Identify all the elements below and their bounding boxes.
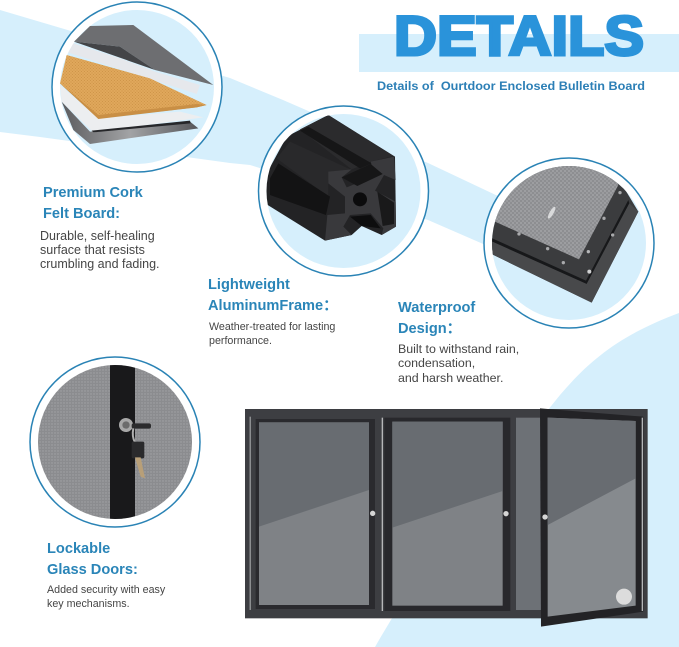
open door	[540, 408, 643, 627]
sticker	[616, 589, 632, 605]
text block: cork felt board: surface that resists	[40, 243, 145, 257]
title: DETAILS	[394, 4, 644, 67]
product photo: three-door bulletin board	[245, 408, 648, 627]
background: lower right light blue shape	[375, 313, 679, 647]
text block: lockable glass doors	[47, 541, 166, 610]
icon: extrusion profile	[265, 115, 396, 241]
text block: waterproof design: condensation,	[398, 356, 475, 370]
left door felt	[259, 422, 369, 605]
text block: aluminum frame	[208, 277, 338, 347]
panel: waterproof corner image	[484, 158, 654, 328]
text block: cork felt board: crumbling and fading.	[40, 257, 160, 271]
text block: lockable glass doors: Added security with easy	[47, 584, 166, 596]
icon: layered board	[60, 25, 213, 144]
text block: lockable glass doors: Lockable	[47, 541, 110, 557]
text block: waterproof design: Waterproof	[398, 300, 475, 316]
centre door felt	[392, 422, 503, 606]
right panel felt behind open door	[516, 418, 541, 610]
text block: waterproof design: and harsh weather.	[398, 371, 503, 385]
text block: aluminum frame: performance.	[209, 335, 272, 347]
text block: waterproof design	[398, 300, 519, 385]
background: diagonal light blue band	[0, 10, 520, 260]
text block: cork felt board: Durable, self-healing	[40, 229, 155, 243]
text block: aluminum frame: AluminumFrame：	[208, 298, 338, 314]
text block: waterproof design: Built to withstand rain,	[398, 342, 519, 356]
text block: cork felt board: Felt Board:	[43, 206, 120, 222]
text block: lockable glass doors: Glass Doors:	[47, 562, 138, 578]
text block: cork felt board	[40, 185, 160, 271]
text block: aluminum frame: Weather-treated for lasting	[209, 321, 335, 333]
text block: cork felt board: Premium Cork	[43, 185, 144, 201]
header band	[359, 34, 679, 72]
icon: wet board corner	[490, 160, 638, 303]
door locks	[370, 511, 548, 520]
panel: lockable door image	[30, 357, 200, 527]
text block: waterproof design: Design：	[398, 321, 461, 337]
subtitle: Details of Ourtdoor Enclosed Bulletin Board	[377, 79, 645, 93]
panel: cork felt board image	[52, 2, 222, 172]
panel: aluminum frame image	[258, 106, 428, 276]
icon: fabric, door post and key	[38, 365, 192, 519]
text block: lockable glass doors: key mechanisms.	[47, 598, 130, 610]
door hinges and highlights	[250, 417, 643, 611]
text block: aluminum frame: Lightweight	[208, 277, 290, 293]
